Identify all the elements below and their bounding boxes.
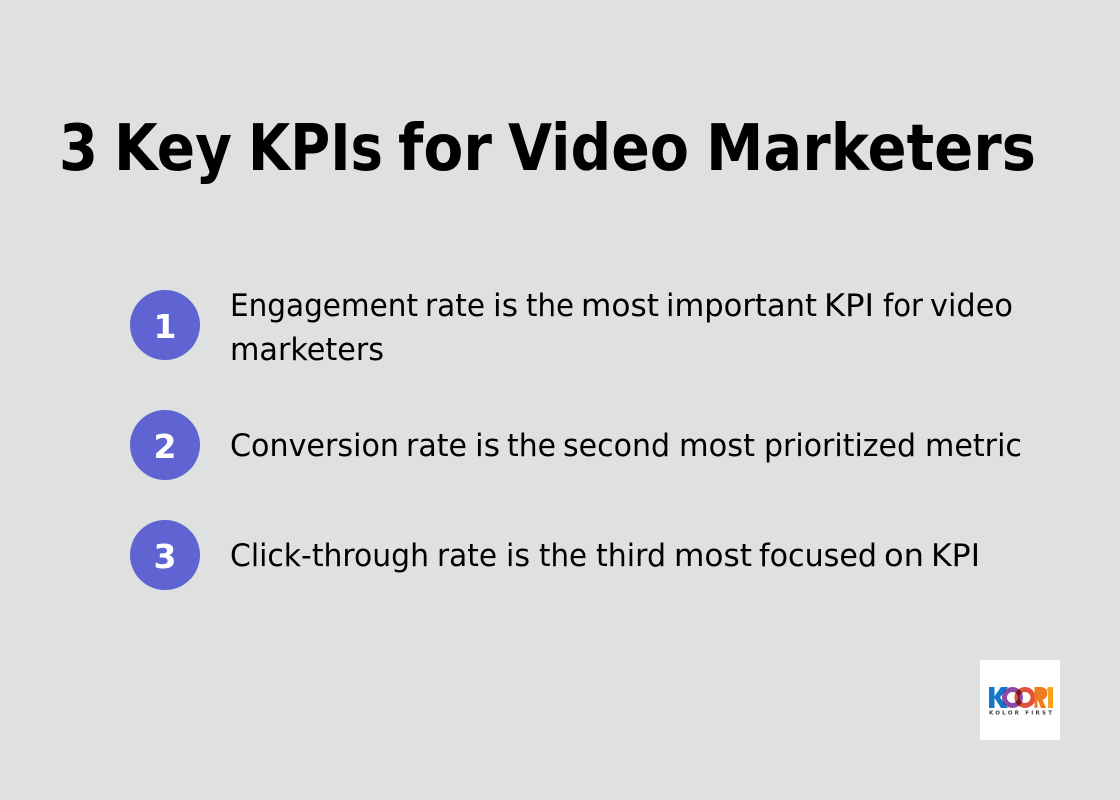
text: click-through rate: most [674,538,752,574]
logo mark letters [989,687,1053,708]
text: engagement rate: is [493,288,518,324]
title: 3 [59,112,98,186]
text: conversion rate: is [475,428,500,464]
text: conversion rate: most [679,428,755,464]
text: click-through rate [230,538,980,574]
text: engagement rate: important [666,288,817,324]
text: engagement rate: KPI [824,288,874,324]
text: engagement rate: video [930,288,1013,324]
text: conversion rate: the [507,428,556,464]
title: for [398,112,492,186]
number badge 1: 1 [154,307,176,346]
text: conversion rate: second [563,428,670,464]
title: Marketers [706,112,1036,186]
text: conversion rate: prioritized [764,428,916,464]
number badge 2 [130,410,200,480]
text: click-through rate: focused [759,538,877,574]
number badge 3: 3 [154,537,176,576]
logo tagline: KOLOR FIRST [989,710,1052,716]
text: click-through rate: Click-through [230,538,429,574]
text: click-through rate: is [506,538,530,574]
text: conversion rate: metric [925,428,1022,464]
text: conversion rate: Conversion [230,428,399,464]
text: engagement rate: rate [425,288,485,324]
number badge 1 [130,290,200,360]
number badge 2: 2 [154,427,176,466]
text: engagement rate: the [526,288,574,324]
text: click-through rate: the [539,538,587,574]
text: engagement rate: Engagement [230,288,418,324]
logo: Koor1 Kolor First [980,660,1060,740]
title: Video [508,112,689,186]
text: engagement rate [230,288,1013,368]
text: conversion rate [230,428,1022,464]
text: click-through rate: third [596,538,666,574]
text: click-through rate: KPI [931,538,980,574]
text: conversion rate: rate [406,428,467,464]
title [59,112,1036,186]
title: KPIs [248,112,383,186]
text: engagement rate: marketers [230,332,384,368]
text: click-through rate: on [884,538,924,574]
list item 2 [130,410,1022,480]
text: engagement rate: for [883,288,923,324]
text: engagement rate: most [581,288,659,324]
text: click-through rate: rate [437,538,497,574]
number badge 3 [130,520,200,590]
list item 1 [130,288,1013,368]
title: Key [114,112,232,186]
list item 3 [130,520,980,590]
